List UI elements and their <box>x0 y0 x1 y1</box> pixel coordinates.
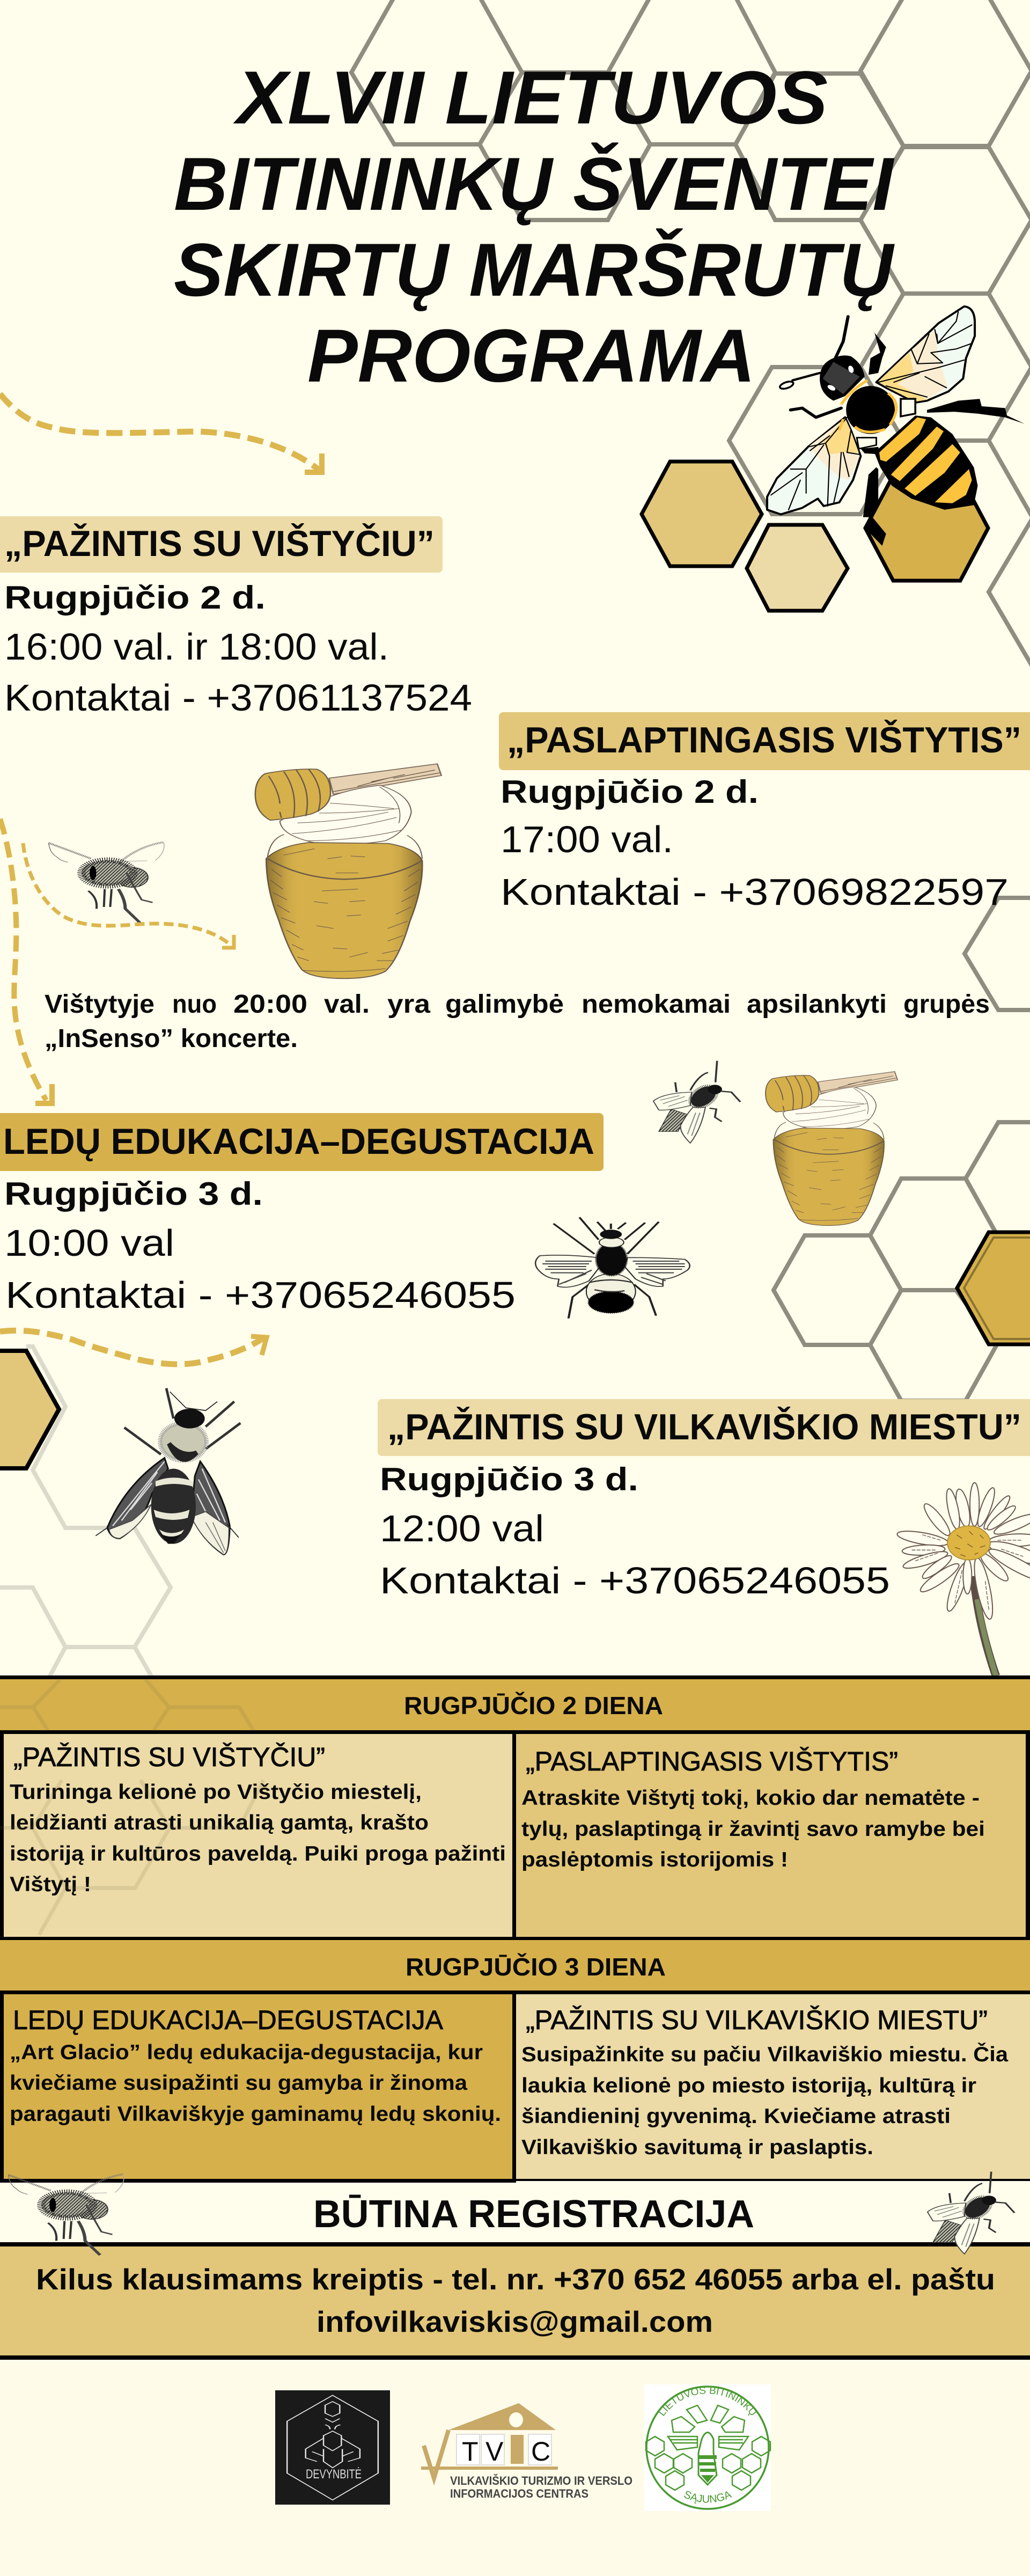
cell: Paslaptingasis Vištytis: „PASLAPTINGASIS VIŠTYTIS” <box>526 1746 898 1776</box>
icon: daisy flower <box>896 1483 1030 1676</box>
label: Paslaptingasis Vištytis route: Kontaktai - +37069822597 <box>501 871 1009 913</box>
cell: Pažintis su Vilkaviškio miestu: Susipažinkite su pačiu Vilkaviškio miestu. Čia <box>521 2042 1008 2066</box>
note about InSenso concert: galimybė <box>445 990 564 1019</box>
note about InSenso concert: nemokamai <box>582 990 731 1019</box>
label: Paslaptingasis Vištytis route: „PASLAPTINGASIS VIŠTYTIS” <box>507 719 1021 760</box>
logo: TVIC Vilkaviškis tourism centre: INFORMACIJOS CENTRAS <box>450 2487 588 2500</box>
cell: Paslaptingasis Vištytis <box>513 1732 1030 1938</box>
icon: honey bee top view sketch <box>95 1388 240 1555</box>
cell: Ledų edukacija-degustacija: kviečiame susipažinti su gamyba ir žinoma <box>10 2072 467 2095</box>
contact band: infovilkaviskis@gmail.com <box>317 2305 713 2338</box>
logo: Lietuvos bitininkų sąjunga: SĄJUNGA <box>684 2491 732 2504</box>
contact band <box>0 2242 1030 2360</box>
logo: TVIC Vilkaviškis tourism centre: T <box>462 2436 479 2467</box>
logo: Lietuvos bitininkų sąjunga: LIETUVOS BITININKŲ <box>659 2387 756 2416</box>
icon: bumblebee top view <box>535 1217 690 1319</box>
band: August 2 heading: RUGPJŪČIO 2 DIENA <box>404 1692 663 1719</box>
band: August 3 heading: RUGPJŪČIO 3 DIENA <box>406 1953 666 1981</box>
cell: Paslaptingasis Vištytis: paslėptomis istorijomis ! <box>521 1848 788 1871</box>
icon: side view bee <box>653 1061 740 1143</box>
band: August 3 heading <box>0 1938 1030 1992</box>
title: PROGRAMA <box>307 313 755 398</box>
note about InSenso concert <box>45 990 990 1053</box>
band: August 2 heading <box>0 1677 1030 1732</box>
icon: honeycomb right middle <box>965 898 1030 1010</box>
note about InSenso concert: Vištytyje <box>45 990 154 1019</box>
logo: Lietuvos bitininkų sąjunga <box>644 2384 771 2511</box>
label: Pažintis su Vilkaviškio miestu route: 12:00 val <box>380 1507 544 1549</box>
cell: Ledų edukacija-degustacija: „Art Glacio” ledų edukacija-degustacija, kur <box>10 2041 483 2064</box>
label: Paslaptingasis Vištytis route <box>499 712 1030 913</box>
cell: Paslaptingasis Vištytis: Atraskite Vištytį tokį, kokio dar nematėte - <box>521 1787 980 1810</box>
cell: Paslaptingasis Vištytis: tylų, paslaptingą ir žavintį savo ramybe bei <box>521 1818 985 1841</box>
note about InSenso concert: nuo <box>172 990 217 1019</box>
cell: Pažintis su Vištyčiu <box>0 1732 513 1938</box>
icon: side bee bottom right <box>928 2172 1014 2254</box>
gold hexagon right <box>957 1232 1030 1344</box>
arrow: long dashed arrow down to third route <box>0 819 52 1103</box>
cell: Ledų edukacija-degustacija: paragauti Vilkaviškyje gaminamų ledų skonių. <box>10 2103 501 2126</box>
icon: flying bee bottom left <box>9 2174 124 2255</box>
label: Ledų edukacija-degustacija route: Rugpjūčio 3 d. <box>4 1176 263 1212</box>
title: SKIRTŲ MARŠRUTŲ <box>174 228 895 312</box>
cell: Pažintis su Vilkaviškio miestu: „PAŽINTIS SU VILKAVIŠKIO MIESTU” <box>526 2005 988 2035</box>
contact band: Kilus klausimams kreiptis - tel. nr. +370 652 46055 arba el. paštu <box>36 2263 995 2296</box>
label: Pažintis su Vištyčiu route <box>0 516 472 719</box>
logo: TVIC Vilkaviškis tourism centre <box>421 2403 632 2500</box>
label: Pažintis su Vilkaviškio miestu route: „PAŽINTIS SU VILKAVIŠKIO MIESTU” <box>387 1406 1021 1447</box>
cell: Pažintis su Vištyčiu: „PAŽINTIS SU VIŠTYČIU” <box>13 1742 325 1772</box>
label: Paslaptingasis Vištytis route: Rugpjūčio 2 d. <box>501 774 759 810</box>
icon: flying bee sketch <box>49 842 164 923</box>
icon: small honey jar <box>766 1072 897 1226</box>
title: BITININKŲ ŠVENTEI <box>174 142 895 226</box>
cell: Pažintis su Vilkaviškio miestu: laukia kelionė po miesto istoriją, kultūrą ir <box>521 2074 976 2097</box>
note about InSenso concert: „InSenso” koncerte. <box>45 1024 298 1053</box>
label: Pažintis su Vilkaviškio miestu route: Rugpjūčio 3 d. <box>380 1461 638 1497</box>
arrow: small dashed arrow to jar <box>23 843 234 948</box>
cell: Pažintis su Vilkaviškio miestu: Vilkaviškio savitumą ir paslaptis. <box>521 2136 873 2159</box>
note about InSenso concert: apsilankyti <box>747 990 887 1019</box>
title: XLVII LIETUVOS <box>233 55 828 140</box>
note about InSenso concert: val. <box>324 990 370 1019</box>
gold honeycomb cells <box>642 462 988 611</box>
schedule table <box>0 1675 1030 2183</box>
cell: Ledų edukacija-degustacija: LEDŲ EDUKACIJA–DEGUSTACIJA <box>13 2005 444 2035</box>
logo: TVIC Vilkaviškis tourism centre: VILKAVIŠKIO TURIZMO IR VERSLO <box>450 2474 632 2487</box>
label: Ledų edukacija-degustacija route: LEDŲ EDUKACIJA–DEGUSTACIJA <box>3 1121 594 1162</box>
logo: Devynbitė <box>275 2390 390 2505</box>
label: Paslaptingasis Vištytis route: 17:00 val. <box>501 818 673 860</box>
logo: TVIC Vilkaviškis tourism centre: V <box>485 2436 504 2467</box>
cell: Ledų edukacija-degustacija <box>0 1992 513 2180</box>
icon: honey jar with dipper <box>255 764 442 978</box>
icon: main honey bee <box>767 306 1025 546</box>
cell: Pažintis su Vilkaviškio miestu: šiandieninį gyvenimą. Kviečiame atrasti <box>521 2105 951 2128</box>
logo: Devynbitė: DEVYNBITĖ <box>306 2467 362 2482</box>
cell: Pažintis su Vištyčiu: Turininga kelionė po Vištyčio miestelį, <box>10 1781 422 1804</box>
label: Pažintis su Vilkaviškio miestu route <box>378 1399 1030 1601</box>
label: Ledų edukacija-degustacija route: 10:00 val <box>4 1222 174 1264</box>
gold hexagon left <box>0 1351 59 1468</box>
cell: Pažintis su Vištyčiu: Vištytį ! <box>10 1873 91 1896</box>
title <box>174 55 895 398</box>
honeycomb cluster right <box>774 1122 1030 1401</box>
label: Pažintis su Vištyčiu route: „PAŽINTIS SU VIŠTYČIU” <box>4 523 435 564</box>
logo: TVIC Vilkaviškis tourism centre: C <box>531 2436 550 2467</box>
faded honeycomb bottom left <box>0 1346 253 1736</box>
arrow: dashed arrow to first route <box>0 394 322 472</box>
label: Pažintis su Vištyčiu route: Rugpjūčio 2 d. <box>4 580 266 616</box>
lower page background <box>0 2360 1030 2576</box>
registration heading: BŪTINA REGISTRACIJA <box>313 2193 754 2236</box>
cell: Pažintis su Vilkaviškio miestu <box>513 1992 1030 2180</box>
cell: Pažintis su Vištyčiu: istoriją ir kultūros paveldą. Puiki proga pažinti <box>10 1842 506 1865</box>
note about InSenso concert: grupės <box>903 990 990 1019</box>
label: Ledų edukacija-degustacija route: Kontaktai - +37065246055 <box>5 1274 516 1316</box>
arrow: dashed arrow to fourth route <box>0 1330 267 1364</box>
label: Pažintis su Vilkaviškio miestu route: Kontaktai - +37065246055 <box>380 1560 890 1601</box>
note about InSenso concert: yra <box>387 990 430 1019</box>
honeycomb outlines top right <box>351 0 1030 667</box>
faded honeycomb overlay on table <box>0 1679 263 1935</box>
label: Pažintis su Vištyčiu route: Kontaktai - +37061137524 <box>4 677 472 719</box>
table border lines <box>0 1675 1030 2183</box>
cell: Pažintis su Vištyčiu: leidžianti atrasti unikalią gamtą, krašto <box>10 1811 429 1834</box>
label: Ledų edukacija-degustacija route <box>0 1113 604 1316</box>
label: Pažintis su Vištyčiu route: 16:00 val. ir 18:00 val. <box>4 626 389 668</box>
note about InSenso concert: 20:00 <box>233 990 307 1019</box>
